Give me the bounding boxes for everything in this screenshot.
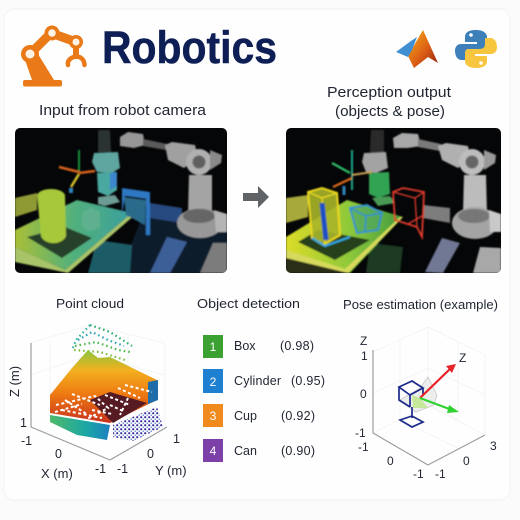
tick and axis labels: -1 [95, 462, 106, 476]
robot arm [120, 132, 145, 148]
item: box: Box [234, 339, 256, 353]
arm and gripper [370, 130, 384, 152]
icon: robot arm [21, 26, 84, 86]
tick and axis labels: -1 [358, 440, 369, 454]
pose axes [78, 150, 80, 172]
heading: perception output: Perception output [327, 85, 451, 101]
item: cylinder: Cylinder [234, 374, 281, 388]
tick and axis labels: 0 [360, 387, 367, 401]
dark purple surface [90, 392, 147, 423]
tick and axis labels: -1 [435, 467, 446, 481]
green arrow [420, 398, 459, 413]
table [286, 195, 308, 223]
item: can: 4 [210, 444, 217, 458]
item: cylinder: 2 [210, 375, 217, 389]
tick and axis labels: 0 [55, 447, 62, 461]
icon: arrow [243, 186, 269, 208]
tick and axis labels [355, 334, 497, 481]
heading: pose estimation: Pose estimation (example) [343, 298, 498, 312]
item: cup [203, 404, 315, 427]
blue wireframe [399, 381, 423, 427]
item: can: Can [234, 444, 257, 458]
pose axes [351, 150, 353, 190]
axes [373, 350, 485, 465]
item: box: (0.98) [280, 339, 314, 353]
panel: perception output image [286, 128, 501, 273]
white speckles [55, 385, 152, 420]
indigo dots [113, 407, 163, 441]
item: can [203, 439, 315, 462]
floor tiles [423, 205, 450, 223]
tick and axis labels: Y (m) [155, 463, 187, 478]
faint object [400, 377, 437, 412]
tick and axis labels: 0 [387, 454, 394, 468]
tick and axis labels: Z [360, 334, 367, 348]
title: Robotics [102, 22, 277, 73]
gripper and wrist [98, 130, 111, 152]
item: box [203, 335, 314, 358]
cup detection: blue [350, 205, 382, 233]
tick and axis labels: -1 [117, 462, 128, 476]
tick and axis labels: 3 [490, 439, 497, 453]
tick and axis labels: 1 [20, 416, 27, 430]
can detection: red [393, 188, 424, 237]
heading: perception output [327, 85, 451, 120]
chart: point cloud [7, 325, 187, 481]
icon: Python logo [455, 30, 497, 68]
heading: object detection: Object detection [197, 297, 300, 311]
heading: point cloud: Point cloud [56, 297, 124, 311]
tick and axis labels: 0 [147, 447, 154, 461]
tick and axis labels: 0 [463, 454, 470, 468]
tick and axis labels: -1 [413, 467, 424, 481]
cup [82, 207, 100, 231]
item: can: (0.90) [281, 444, 315, 458]
floor tiles [130, 212, 227, 273]
top dots [72, 325, 132, 360]
tick and axis labels [7, 366, 187, 481]
orange surface [50, 350, 157, 423]
tick and axis labels: -1 [21, 434, 32, 448]
item: cup: 3 [210, 409, 217, 423]
cylinder [37, 189, 66, 243]
tick and axis labels: 1 [361, 349, 368, 363]
grid [30, 325, 165, 428]
frame object [124, 197, 146, 225]
heading: input: Input from robot camera [39, 103, 207, 119]
tick and axis labels: Z (m) [7, 366, 22, 397]
teal surface [50, 415, 110, 440]
item: cup: Cup [234, 409, 257, 423]
icon: MATLAB logo [396, 30, 438, 68]
heading: perception output: (objects & pose) [335, 104, 445, 120]
item: cylinder: (0.95) [291, 374, 325, 388]
item: box: 1 [210, 340, 217, 354]
grid [373, 327, 485, 448]
axes [31, 343, 167, 460]
tick and axis labels: Z [459, 351, 466, 365]
red arrow [420, 364, 456, 398]
chart: pose estimation [355, 327, 497, 481]
tick and axis labels: -1 [355, 426, 366, 440]
tick and axis labels: X (m) [41, 466, 73, 481]
tick and axis labels: 1 [173, 432, 180, 446]
panel: camera image [15, 128, 227, 273]
box detection: yellow [308, 188, 340, 245]
item: cylinder [203, 369, 325, 393]
legend: object detection [203, 335, 325, 462]
item: cup: (0.92) [281, 409, 315, 423]
table [15, 193, 37, 217]
